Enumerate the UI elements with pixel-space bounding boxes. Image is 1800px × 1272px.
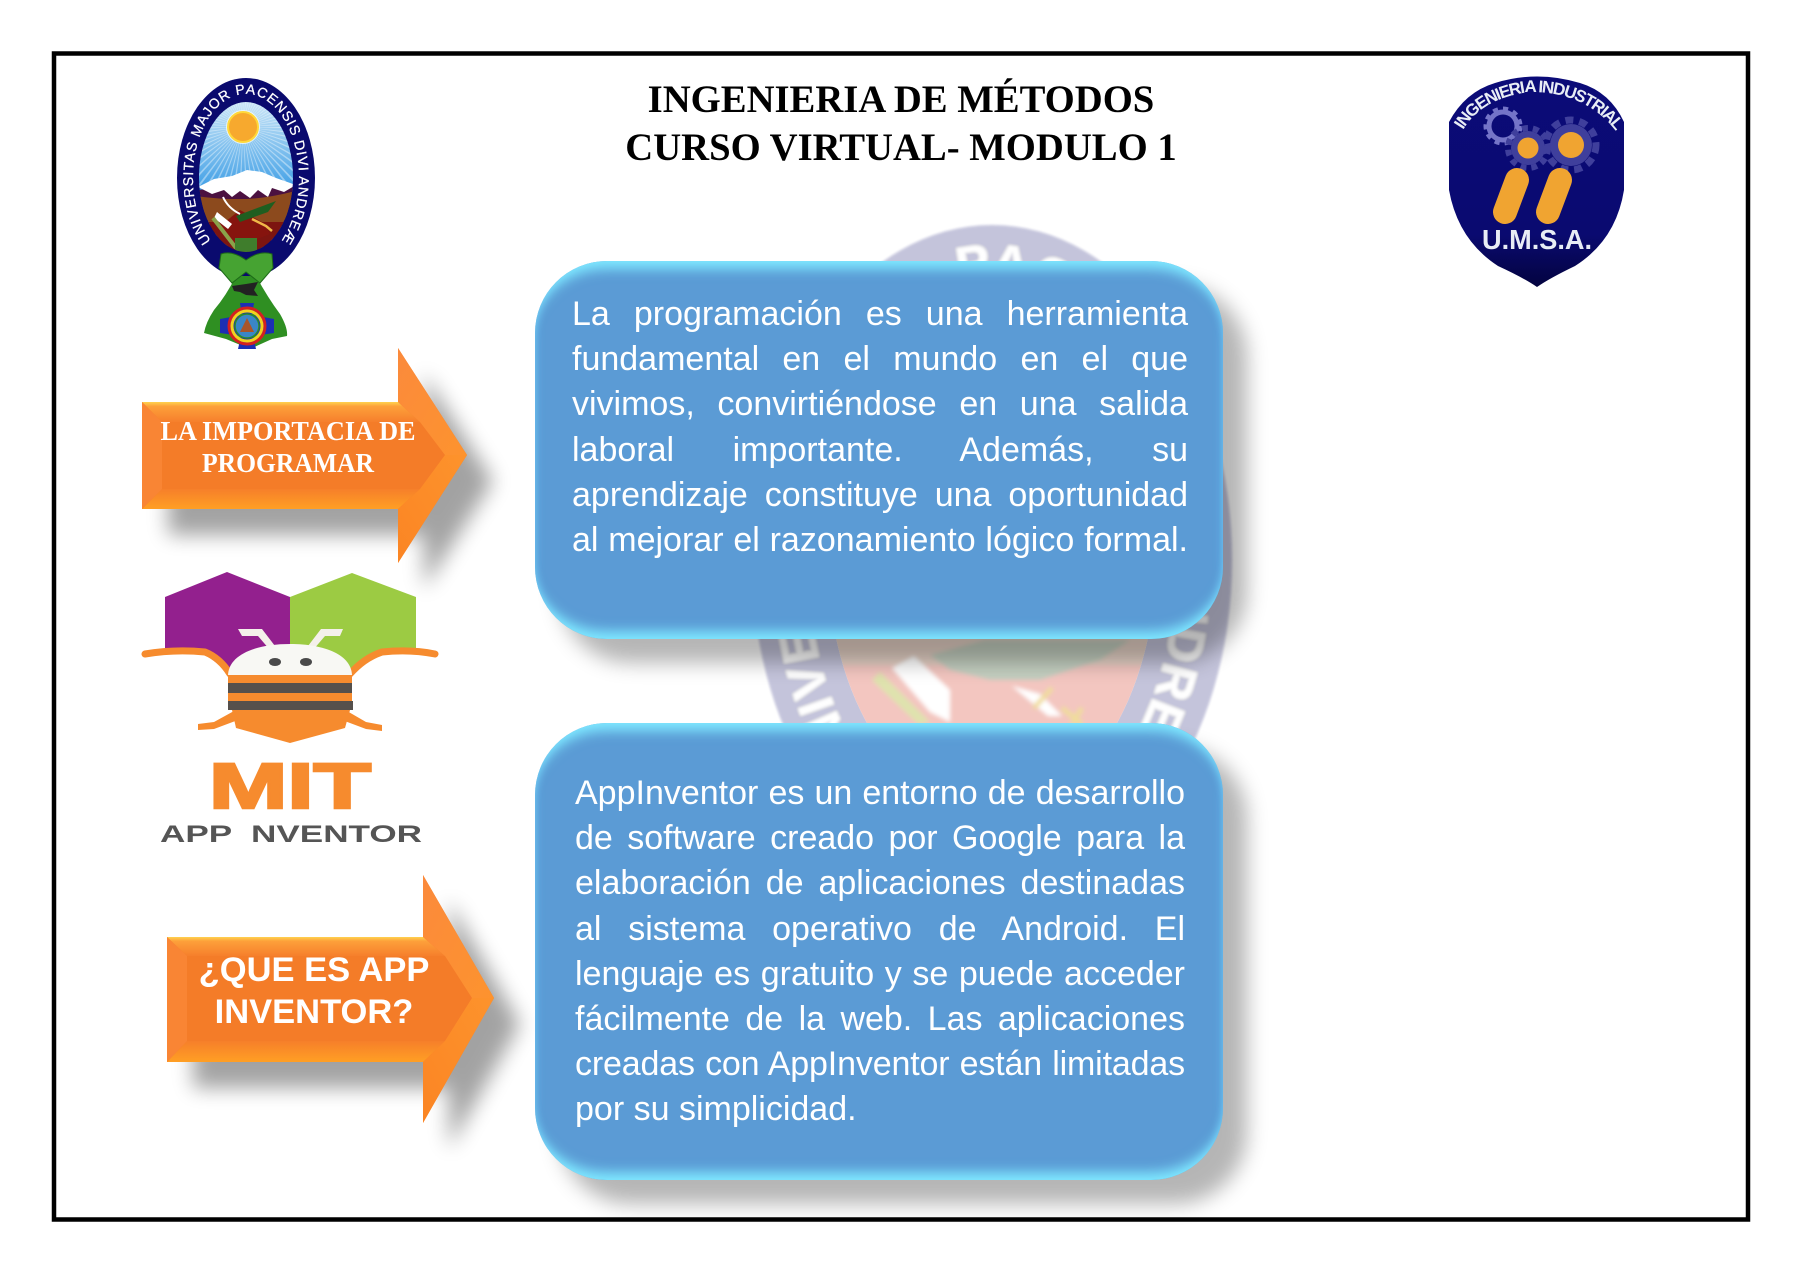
antennae (238, 629, 343, 650)
arrow shadow (193, 901, 520, 1149)
bee head (228, 644, 352, 676)
text block: app inventor: de software creado por Google para la (575, 819, 1185, 857)
arrow label: PROGRAMAR (202, 448, 374, 478)
text block: app inventor: elaboración de aplicaciones destinadas (575, 864, 1185, 902)
crest ring (177, 78, 315, 278)
arrow shadow (168, 374, 493, 589)
gear: medium (1508, 128, 1548, 168)
watermark: university crest (758, 224, 1233, 739)
logo: Universidad Mayor de San Andrés crest (177, 78, 315, 349)
watermark scene (836, 639, 1148, 723)
arrow label: LA IMPORTACIA DE (160, 416, 416, 446)
crest motto: UNIVERSITAS MAJOR PACENSIS DIVI ANDREÆ (183, 84, 309, 246)
shield arc label: INGENIERIA INDUSTRIAL (1454, 80, 1621, 131)
text block: la programación: vivimos, convirtiéndose en una salida (572, 385, 1188, 423)
arrow label (199, 951, 429, 1031)
text block: la programación: al mejorar el razonamiento lógico formal. (572, 521, 1188, 559)
text block: app inventor: AppInventor es un entorno de desarrollo (575, 774, 1185, 812)
orange bars (1505, 180, 1560, 212)
bee body (198, 675, 382, 743)
crest scene (199, 102, 293, 252)
arrow label: INVENTOR? (215, 993, 413, 1031)
text block: app inventor (575, 774, 1186, 1128)
text block: la programación: aprendizaje constituye una oportunidad (572, 476, 1188, 514)
text block: la programación: La programación es una herramienta (572, 295, 1188, 333)
text block: la programación: fundamental en el mundo en el que (572, 340, 1188, 378)
text block: la programación (572, 295, 1188, 559)
text block: app inventor: creadas con AppInventor están limitadas (575, 1045, 1185, 1083)
text block: app inventor: por su simplicidad. (575, 1090, 857, 1128)
text block: app inventor: fácilmente de la web. Las aplicaciones (575, 1000, 1185, 1038)
shield label: U.M.S.A. (1482, 224, 1592, 255)
text block: app inventor: lenguaje es gratuito y se puede acceder (575, 955, 1185, 993)
panel: app inventor (535, 723, 1223, 1180)
arrow label (160, 416, 416, 478)
title: INGENIERIA DE MÉTODOS (648, 79, 1154, 121)
gear: small (1486, 109, 1520, 143)
watermark ring: UNIVERSITAS MAJOR PACENSIS DIVI ANDREÆ (778, 244, 1210, 729)
logo: MIT App Inventor (145, 572, 435, 848)
purple hexagon (165, 572, 290, 672)
arrow: la importancia de programar (142, 348, 493, 589)
logo: Ingenieria Industrial U.M.S.A. shield (1449, 76, 1624, 287)
condor (232, 282, 258, 296)
arrow: que es app inventor (167, 875, 520, 1149)
bee eyes (269, 658, 312, 666)
text block: app inventor: al sistema operativo de Android. El (575, 910, 1185, 948)
gear: large (1546, 120, 1596, 170)
panel: la programación (535, 261, 1223, 639)
medal (220, 303, 274, 349)
arrow label: ¿QUE ES APP (199, 951, 429, 989)
app inventor wordmark: APP NVENTOR (160, 821, 422, 848)
green bow (219, 253, 273, 283)
MIT wordmark: MIT (209, 750, 371, 822)
title: CURSO VIRTUAL- MODULO 1 (625, 127, 1177, 169)
green drape (204, 276, 287, 349)
arrow body (167, 875, 494, 1123)
title (625, 79, 1177, 169)
green hexagon (290, 573, 416, 672)
text block: la programación: laboral importante. Además, su (572, 431, 1188, 469)
arrow body (142, 348, 467, 563)
bee arms (145, 651, 435, 674)
shield (1449, 76, 1624, 287)
